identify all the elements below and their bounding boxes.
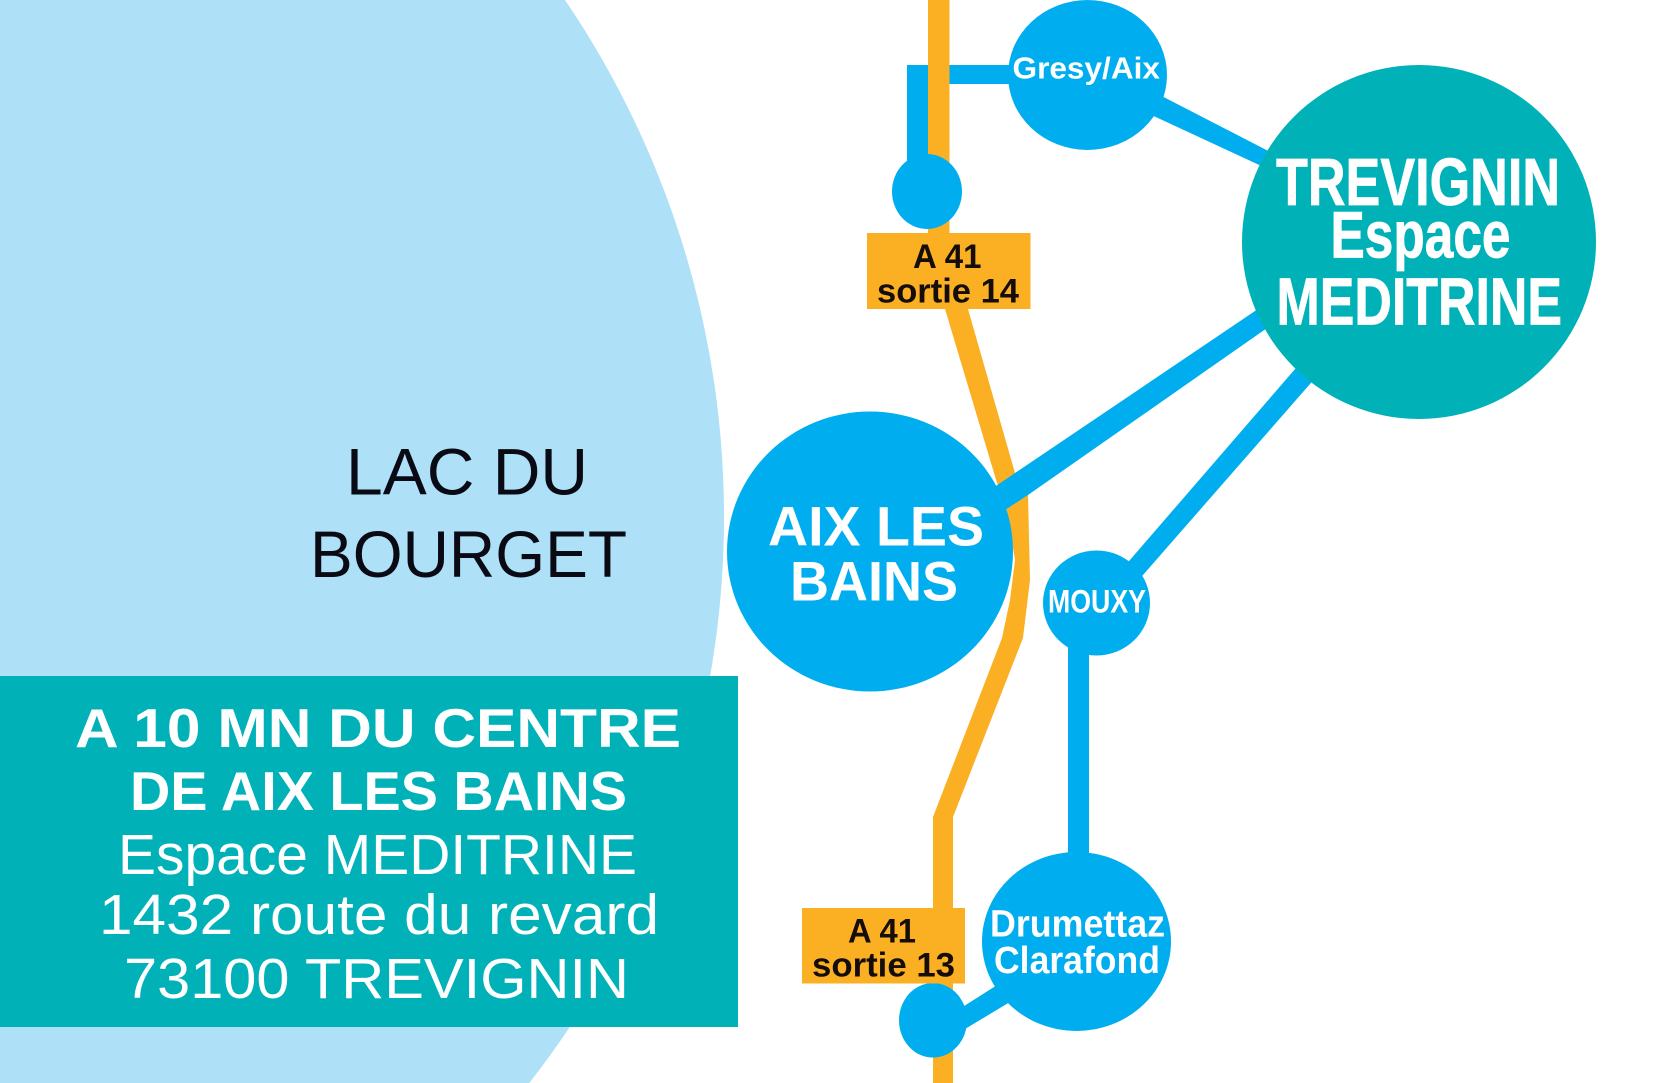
panel heading: A 10 MN DU CENTRE <box>75 697 681 759</box>
node: Aix les Bains: BAINS <box>790 550 958 612</box>
node: Mouxy <box>1043 550 1150 656</box>
label: A41 exit 14 <box>867 233 1030 310</box>
label: A41 exit 13: sortie 13 <box>812 946 955 984</box>
label: A41 exit 14: A 41 <box>913 238 982 276</box>
node: Aix les Bains <box>727 412 1013 692</box>
lake label: BOURGET <box>310 517 627 591</box>
node: Mouxy: MOUXY <box>1048 584 1146 620</box>
panel address text: 1432 route du revard <box>99 883 659 947</box>
panel address text: Espace MEDITRINE <box>118 823 637 887</box>
panel: address <box>0 676 738 1027</box>
node: Aix les Bains: AIX LES <box>768 494 984 558</box>
label: A41 exit 13: A 41 <box>848 912 916 950</box>
panel heading: DE AIX LES BAINS <box>130 760 627 822</box>
node: Trevignin Espace Meditrine: TREVIGNIN <box>1276 145 1560 220</box>
node: Gresy/Aix: Gresy/Aix <box>1012 50 1161 86</box>
node: exit 13 <box>899 983 967 1058</box>
panel heading <box>75 697 681 822</box>
node: Gresy/Aix <box>1008 0 1167 150</box>
label: A41 exit 14: sortie 14 <box>877 272 1019 310</box>
node: Drumettaz Clarafond: Drumettaz <box>990 904 1165 946</box>
panel address text: 73100 TREVIGNIN <box>124 947 629 1011</box>
label: A41 exit 13 <box>802 908 965 984</box>
node: Trevignin Espace Meditrine: Espace <box>1330 198 1510 272</box>
node: Drumettaz Clarafond: Clarafond <box>994 940 1160 982</box>
node: Drumettaz Clarafond <box>982 852 1171 1031</box>
local roads <box>950 90 1317 1035</box>
local road: Gresy link <box>907 65 1020 180</box>
panel address text <box>99 823 659 1011</box>
node: Trevignin Espace Meditrine: MEDITRINE <box>1276 264 1562 340</box>
node: exit 14 <box>892 154 962 229</box>
lake shape <box>0 0 724 1083</box>
lake label: LAC DU <box>346 434 588 508</box>
node: Trevignin Espace Meditrine <box>1242 65 1596 419</box>
motorway A41 <box>928 0 1030 1083</box>
lake label <box>310 434 627 591</box>
